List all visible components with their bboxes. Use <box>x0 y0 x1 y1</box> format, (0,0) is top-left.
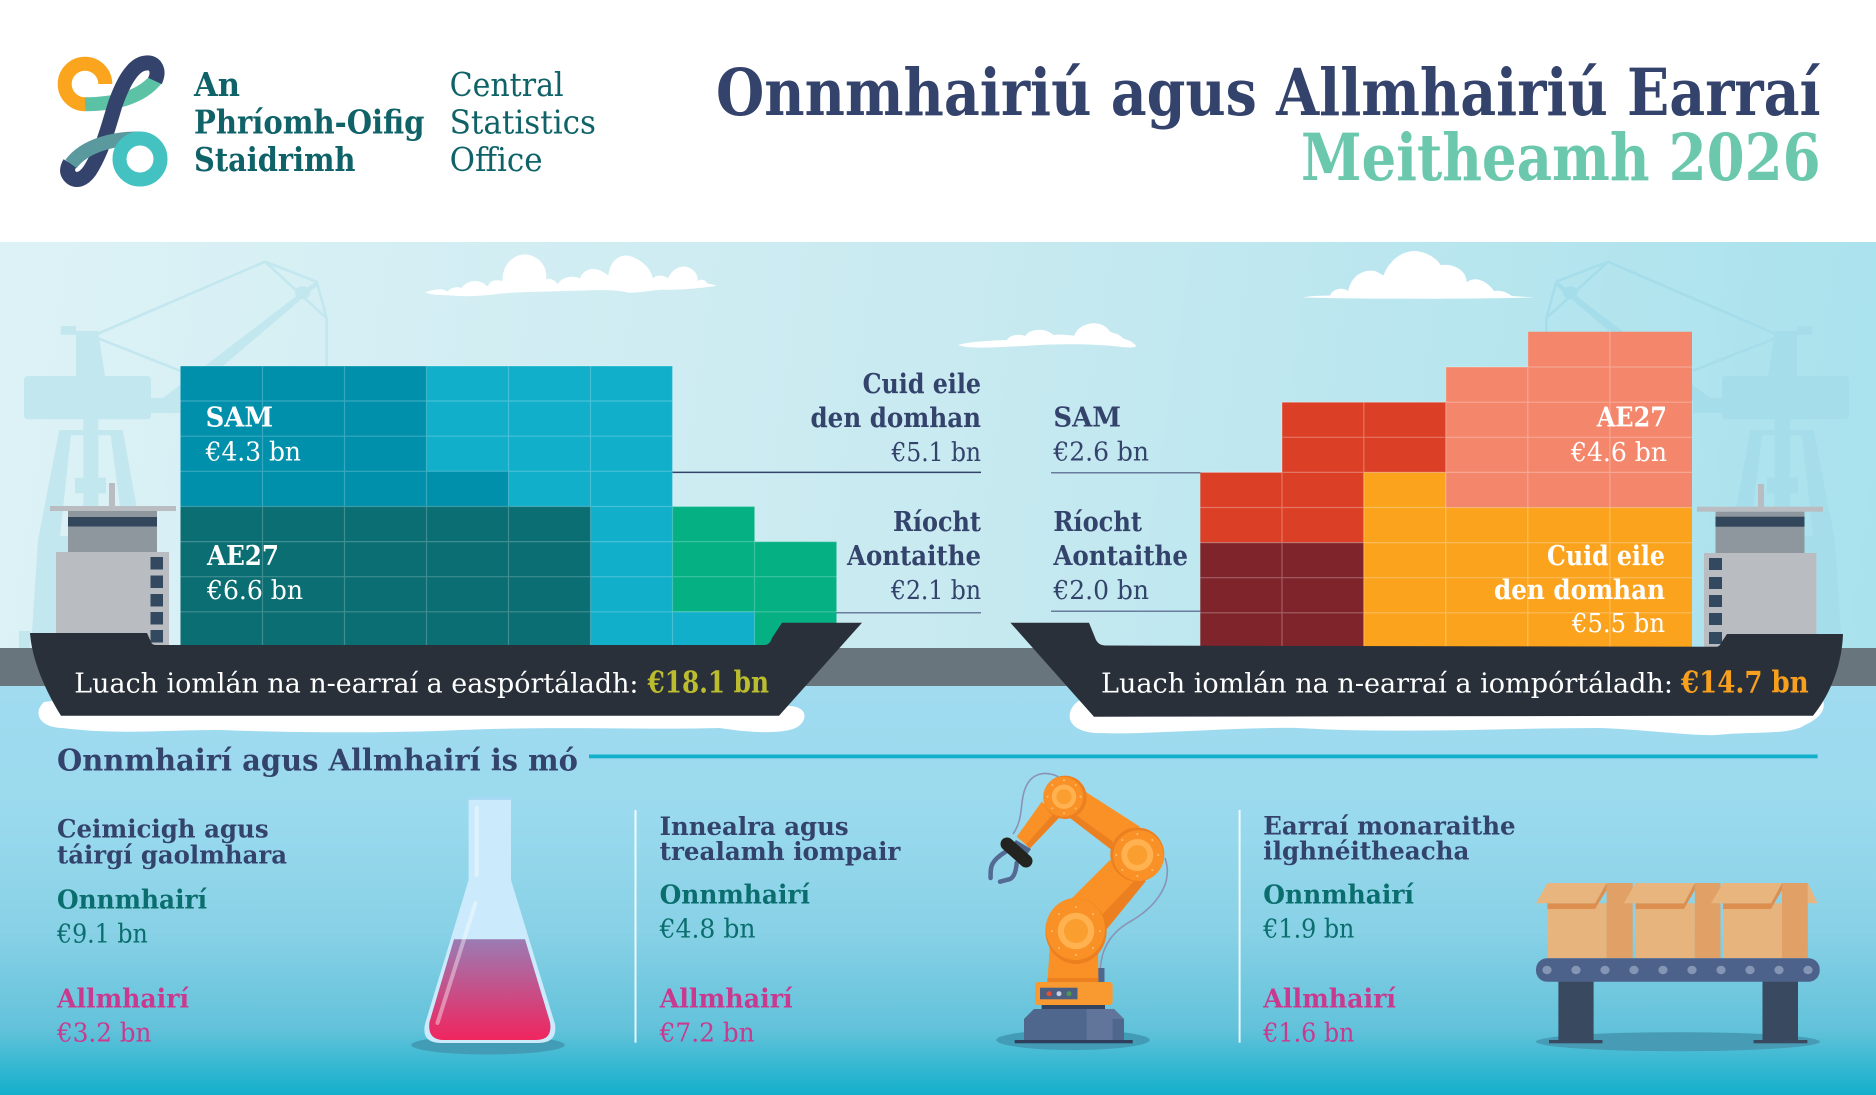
water background <box>0 686 1876 1095</box>
panel: chemicals text: Allmhairí <box>56 984 189 1014</box>
panel: machinery text: Allmhairí <box>659 984 793 1014</box>
label: rest of world exports <box>672 368 981 473</box>
logo text Irish: An <box>193 65 240 104</box>
total exports text <box>74 666 769 701</box>
label: EU27 exports: €6.6 bn <box>206 576 303 606</box>
containers: EU27 imports <box>1446 332 1692 508</box>
total exports text: €18.1 bn <box>647 666 769 701</box>
box 2 <box>1624 883 1720 958</box>
label: rest of world imports <box>1494 540 1665 639</box>
panel: manufactured goods text: Onnmhairí <box>1263 880 1414 910</box>
label: rest of world imports: Cuid eile <box>1547 540 1665 572</box>
containers: rest of world imports <box>1364 472 1692 647</box>
ship hull left <box>30 623 862 716</box>
panel: manufactured goods text: Allmhairí <box>1262 984 1396 1014</box>
label: EU27 imports: AE27 <box>1596 402 1667 434</box>
containers: UK imports <box>1200 543 1364 647</box>
total imports text: €14.7 bn <box>1680 666 1809 701</box>
panel: chemicals text: táirgí gaolmhara <box>57 840 287 869</box>
icon: conveyor belt with boxes <box>1536 883 1820 1051</box>
panel: machinery text: Onnmhairí <box>660 880 810 910</box>
box 1 <box>1536 883 1633 958</box>
total imports text: Luach iomlán na n-earraí a iompórtáladh: <box>1101 669 1673 700</box>
crane left silhouette <box>19 262 327 648</box>
panel: manufactured goods text: €1.6 bn <box>1262 1018 1354 1048</box>
total exports text: Luach iomlán na n-earraí a easpórtáladh: <box>74 669 639 700</box>
panel: machinery text <box>659 812 902 1048</box>
foam left <box>38 700 805 732</box>
panel: machinery text: €4.8 bn <box>659 914 756 944</box>
logo text English <box>450 65 596 179</box>
panel: chemicals text: Ceimicigh agus <box>57 815 269 844</box>
panel: machinery text: €7.2 bn <box>659 1018 755 1048</box>
total imports text <box>1101 666 1809 701</box>
label: EU27 imports <box>1570 402 1667 468</box>
cloud 2 <box>1303 251 1533 299</box>
title: Onnmhairiú agus Allmhairiú Earraí <box>716 55 1821 131</box>
container: extra blue <box>672 612 754 647</box>
label: UK exports <box>836 506 982 614</box>
panel: manufactured goods text: ilghnéitheacha <box>1263 836 1470 865</box>
label: UK imports <box>1051 506 1200 612</box>
label: rest of world imports: €5.5 bn <box>1571 609 1665 639</box>
logo text Irish <box>193 65 425 179</box>
label: rest of world exports: €5.1 bn <box>891 438 981 468</box>
panel: manufactured goods text: €1.9 bn <box>1262 914 1354 944</box>
containers: USA exports <box>180 366 508 506</box>
section heading rule <box>589 754 1818 758</box>
divider 1 <box>634 810 636 1043</box>
panel: manufactured goods text: Earraí monaraithe <box>1263 811 1516 840</box>
label: USA exports: SAM <box>206 402 273 434</box>
logo text Irish: Phríomh-Oifig <box>194 102 425 142</box>
divider 2 <box>1239 810 1241 1043</box>
box 3 <box>1711 883 1818 958</box>
panel: chemicals text: Onnmhairí <box>57 885 207 915</box>
panel: manufactured goods text <box>1262 811 1516 1048</box>
logo text English: Central <box>450 65 564 104</box>
ship bridge right <box>1697 484 1823 649</box>
label: rest of world exports: den domhan <box>810 402 981 434</box>
label: EU27 imports: €4.6 bn <box>1570 438 1667 468</box>
label: UK imports: €2.0 bn <box>1052 576 1149 606</box>
panel: chemicals text <box>56 815 287 1048</box>
icon: flask <box>411 797 565 1054</box>
label: UK imports: Aontaithe <box>1052 540 1188 572</box>
label: rest of world exports: Cuid eile <box>863 368 981 400</box>
subtitle date: Meitheamh 2026 <box>1301 120 1821 196</box>
label: EU27 exports <box>206 540 303 606</box>
logo text English: Office <box>450 140 543 179</box>
import containers <box>1200 332 1692 647</box>
export containers <box>180 366 836 647</box>
label: UK exports: €2.1 bn <box>890 576 981 606</box>
label: UK exports: Ríocht <box>893 506 982 538</box>
label: USA exports: €4.3 bn <box>205 438 301 468</box>
panel: machinery text: Innealra agus <box>660 812 849 841</box>
label: UK exports: Aontaithe <box>846 540 981 572</box>
containers: USA imports <box>1200 402 1446 543</box>
panel: chemicals text: €9.1 bn <box>56 919 148 949</box>
label: EU27 exports: AE27 <box>206 540 279 572</box>
containers: EU27 exports <box>180 506 590 647</box>
logo mark <box>65 63 160 180</box>
crane right silhouette <box>1546 262 1849 648</box>
section heading: Onnmhairí agus Allmhairí is mó <box>57 744 578 779</box>
cloud 3 <box>958 323 1136 348</box>
panel: chemicals text: €3.2 bn <box>56 1018 151 1048</box>
label: USA imports <box>1051 402 1200 474</box>
logo text English: Statistics <box>450 102 596 142</box>
panel: machinery text: trealamh iompair <box>660 837 902 866</box>
containers: rest of world exports <box>426 366 672 647</box>
label: USA imports: €2.6 bn <box>1052 438 1149 468</box>
label: USA exports <box>205 402 301 468</box>
label: UK imports: Ríocht <box>1053 506 1143 538</box>
containers: UK exports <box>672 506 836 647</box>
sky background <box>0 242 1876 650</box>
ship hull right <box>1010 623 1843 717</box>
quay band <box>0 648 1876 686</box>
header background <box>0 0 1876 242</box>
label: USA imports: SAM <box>1053 402 1121 434</box>
icon: robot arm <box>991 773 1167 1050</box>
cloud 1 <box>425 254 717 296</box>
label: rest of world imports: den domhan <box>1494 574 1665 606</box>
foam right <box>1070 700 1824 735</box>
ship bridge left <box>50 483 176 648</box>
logo text Irish: Staidrimh <box>194 140 356 179</box>
